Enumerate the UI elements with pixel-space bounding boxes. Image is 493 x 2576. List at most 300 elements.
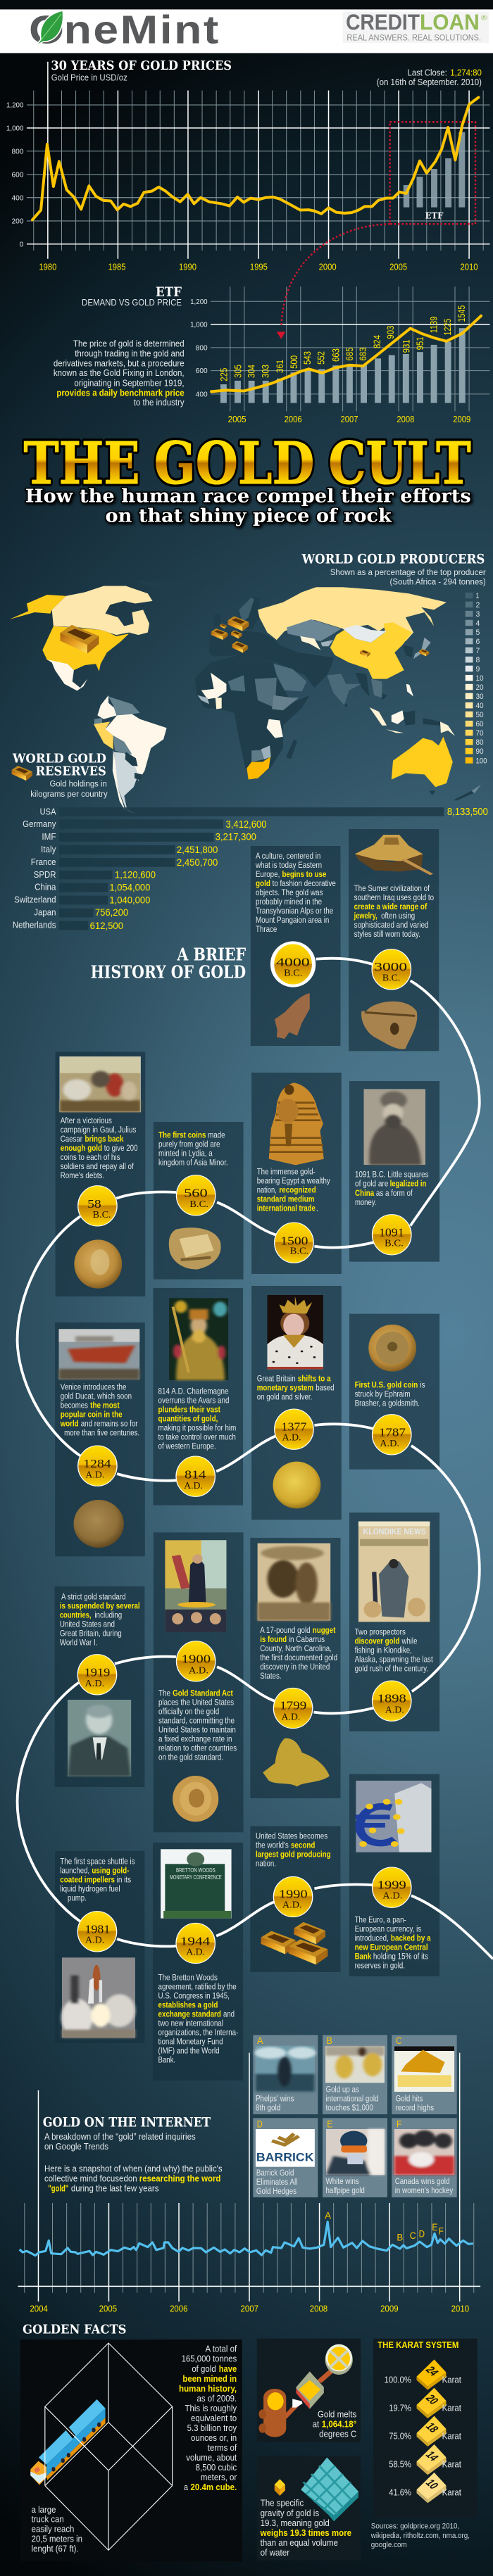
panel: 4000 B.C.: what is today Eastern [255, 861, 322, 870]
chart: ETF demand vs gold price: 1225 [443, 319, 453, 335]
panel: 1799 A.D.: County, North Carolina, [260, 1644, 332, 1653]
reserves bar: Germany: Germany [23, 819, 56, 830]
medallion: 58 B.C.: B.C. [93, 1208, 111, 1220]
subtitle [25, 486, 471, 526]
heading: gold on the internet: on Google Trends [44, 2142, 108, 2152]
chart: ETF demand vs gold price: 2007 [340, 414, 358, 424]
panel: 1898 A.D.: discover gold [355, 1637, 399, 1646]
medallion: 1900 A.D.: A.D. [189, 1665, 208, 1676]
medallion: 1919 A.D. [77, 1655, 117, 1695]
panel: 1500 B.C.: standard medium [257, 1195, 314, 1204]
medallion: 4000 B.C.: 4000 [276, 956, 310, 969]
panel: 1787 A.D.: is [420, 1381, 425, 1390]
panel: 1898 A.D.: gold rush of the century. [355, 1665, 428, 1674]
medallion: 1500 B.C.: 1500 [280, 1235, 308, 1248]
panel: 1898 A.D.: Two prospectors [355, 1628, 406, 1637]
panel: 1900 A.D.: The [158, 1688, 170, 1698]
panel: 4000 B.C.: Thrace [256, 925, 277, 934]
panel: 58 B.C.: to give 200 [104, 1144, 138, 1153]
panel: 1944 A.D.: U.S. Congress in 1945, [158, 1991, 230, 2001]
heading: golden facts: GOLDEN FACTS [23, 2323, 126, 2337]
panel: 4000 B.C.: Transylvanian Alps or the [256, 907, 333, 916]
panel: 1981 A.D.: The first space shuttle is [60, 1857, 135, 1867]
panel: 1999 A.D.: European currency, is [355, 1924, 421, 1934]
text: truck length: truck can [32, 2515, 64, 2525]
panel: 1900 A.D.: on the gold standard. [158, 1753, 223, 1762]
karat row: 18 [389, 2416, 462, 2446]
text: truck length: lenght (67 ft). [32, 2544, 79, 2554]
panel: 560 B.C.: made [208, 1131, 225, 1140]
panel: 1944 A.D.: (IMF) and the World [158, 2046, 220, 2056]
image: gold bars [261, 1922, 327, 1964]
panel: specific gravity: The specific [261, 2499, 304, 2508]
chart: ETF demand vs gold price [190, 224, 490, 424]
panel: specific gravity: than an equal volume [261, 2538, 338, 2548]
line chart: 30 years of gold prices: 1,200 [6, 101, 23, 109]
text: total gold mined: volume, about [186, 2453, 237, 2463]
reserves bars: remaining countries: Netherlands [13, 921, 56, 930]
medallion: 1900 A.D.: 1900 [182, 1653, 211, 1666]
text: snapshot of gold searches: collective mind focusedon [44, 2173, 137, 2184]
panel: 1500 B.C.: The immense gold- [257, 1167, 316, 1177]
map legend: 2 [475, 600, 480, 610]
panel: 58 B.C. [56, 1052, 145, 1296]
reserves bars: remaining countries: 612,500 [90, 920, 123, 931]
panel: 1919 A.D.: United States and [60, 1620, 115, 1629]
chart: ETF demand vs gold price: 903 [385, 326, 396, 339]
text: total gold mined: 165,000 tonnes [182, 2354, 237, 2364]
medallion: 1500 B.C. [275, 1223, 313, 1263]
panel: 3000 B.C.: jewelry, [354, 911, 377, 921]
reserves bars: remaining countries: SPDR [34, 870, 56, 880]
panel: 1919 A.D.: including [94, 1610, 122, 1620]
panel: 1500 B.C.: international trade [257, 1204, 316, 1213]
chart year labels [30, 2304, 469, 2314]
news tile C: gold record highs [392, 2035, 457, 2114]
text: truck length: easily reach [32, 2525, 74, 2534]
reserves bars: remaining countries: Switzerland [14, 895, 56, 905]
news tile F: Canada hockey: F [397, 2119, 401, 2130]
medallion: 1500 B.C.: B.C. [290, 1245, 308, 1256]
panel: 3000 B.C. [349, 829, 439, 1051]
line chart: 30 years of gold prices: 600 [12, 171, 23, 179]
line chart: 30 years of gold prices: 0 [20, 241, 23, 248]
karat row: 20: Karat [442, 2403, 462, 2413]
medallion: 1091 B.C.: 1091 [379, 1226, 404, 1239]
medallion: 1981 A.D. [77, 1912, 117, 1952]
panel: 58 B.C.: Caesar [61, 1135, 82, 1144]
panel: 1898 A.D.: while [401, 1637, 417, 1646]
map legend: 4 [475, 619, 480, 628]
map legend: 60 [475, 719, 484, 728]
chart year labels: 2010 [451, 2304, 469, 2314]
karat row: 10: Karat [442, 2487, 462, 2498]
text: total gold mined: have [219, 2364, 237, 2374]
panel: 814 A.D.: making it possible for him [158, 1423, 236, 1433]
panel: 1981 A.D.: coated impellers [60, 1875, 115, 1885]
panel: 1799 A.D. [250, 1538, 340, 1798]
panel: 4000 B.C.: A culture, centered in [256, 852, 320, 861]
karat row: 24: 24 [423, 2364, 442, 2378]
medallion: 1944 A.D.: 1944 [180, 1935, 210, 1948]
icon: truck [30, 2399, 106, 2485]
image: English gold coin [273, 1462, 320, 1508]
CreditLoan logo: CREDIT [346, 10, 420, 34]
text: total gold mined: meters, or [201, 2473, 237, 2482]
medallion: 1990 A.D.: A.D. [282, 1899, 302, 1910]
news tile A: Phelps: A [257, 2035, 263, 2046]
image: Venice painting [58, 1329, 139, 1379]
panel: 1981 A.D.: liquid hydrogen fuel [60, 1884, 120, 1894]
panel: 1990 A.D.: United States becomes [256, 1831, 327, 1841]
medallion: 1990 A.D. [273, 1876, 313, 1917]
chart: ETF demand vs gold price: 824 [373, 335, 382, 348]
karat row: 18: Karat [442, 2431, 462, 2442]
panel: 4000 B.C.: objects. The gold was [256, 888, 323, 897]
image: gold nugget [263, 1738, 330, 1786]
medallion: 814 A.D.: 814 [185, 1468, 206, 1482]
image: pharaoh mask [269, 1082, 324, 1165]
panel: 58 B.C.: After a victorious [61, 1116, 112, 1125]
icon: foundry [258, 2344, 353, 2437]
panel: 560 B.C.: kingdom of Asia Minor. [158, 1158, 228, 1168]
panel: 1990 A.D.: second [291, 1841, 315, 1850]
medallion: 560 B.C.: B.C. [189, 1198, 208, 1209]
reserves bars: remaining countries: IMF [42, 832, 56, 842]
line chart: Google Trends gold searches: E [432, 2221, 437, 2233]
text: gold fixing explanation: originating in September 1919, [74, 377, 185, 388]
medallion: 560 B.C.: 560 [184, 1187, 208, 1200]
medallion: 1981 A.D.: 1981 [85, 1923, 110, 1936]
heading: ETF demand vs gold price: DEMAND VS GOLD PRICE [82, 297, 182, 308]
line chart: Google Trends gold searches [18, 2053, 480, 2302]
panel: 1799 A.D.: A 17-pound gold [260, 1626, 311, 1635]
medallion: 1799 A.D.: 1799 [280, 1699, 306, 1712]
text: total gold mined: terms of [208, 2443, 237, 2453]
panel: 1900 A.D.: Gold Standard Act [173, 1688, 233, 1698]
line chart: 30 years of gold prices: 2005 [389, 261, 407, 272]
panel: 58 B.C.: enough gold [61, 1144, 102, 1153]
panel: 1284 A.D.: popular coin in the [61, 1410, 123, 1420]
panel: 1919 A.D.: A strict gold standard [61, 1592, 126, 1602]
panel: 1944 A.D.: agreement, ratified by the [158, 1982, 237, 1992]
map legend [466, 591, 487, 765]
karat row: 10: 41.6% [389, 2487, 411, 2498]
panel: 1284 A.D.: gold Ducat, which soon [61, 1391, 132, 1401]
news tile B: gold touches $1,000: international gold [326, 2095, 379, 2104]
heading: world gold reserves [12, 751, 108, 798]
panel: 1500 B.C.: bearing Egypt a wealthy [257, 1176, 330, 1186]
image: Bretton Woods sign: BRETTON WOODS [176, 1867, 216, 1874]
panel: 1799 A.D.: is found [260, 1635, 287, 1644]
panel: 1898 A.D. [349, 1513, 439, 1731]
medallion: 1284 A.D. [78, 1446, 117, 1486]
karat row: 14: Karat [442, 2459, 462, 2470]
reserves bars: remaining countries: 3,217,300 [216, 831, 256, 842]
subtitle: on that shiny piece of rock [106, 505, 392, 526]
image: arrowhead [275, 993, 310, 1039]
gold bar markers [60, 616, 429, 657]
karat row: 24: 100.0% [385, 2375, 411, 2385]
panel: 1284 A.D.: the most [90, 1401, 120, 1410]
panel: 4000 B.C.: Mount Pangaion area in [256, 916, 329, 925]
title: The Gold Cult [23, 429, 471, 498]
news tile C: gold record highs: C [396, 2035, 402, 2046]
medallion: 3000 B.C.: B.C. [382, 972, 400, 983]
text: total gold mined: as of 2009. [196, 2394, 237, 2404]
chart: ETF demand vs gold price: 931 [401, 339, 411, 353]
panel: 1981 A.D.: launched, [60, 1866, 89, 1876]
medallion: 1284 A.D.: A.D. [85, 1469, 104, 1480]
panel: 1799 A.D.: nugget [313, 1626, 336, 1635]
panel: 1377 A.D.: monetary system [257, 1383, 313, 1393]
reserves bars: remaining countries: China [35, 883, 56, 892]
icon: gold cube vs water blocks [275, 2458, 358, 2521]
panel: 58 B.C.: Rome's debts. [61, 1171, 104, 1180]
panel: gold melts [257, 2339, 361, 2442]
panel: 3000 B.C.: styles still worn today. [354, 930, 420, 939]
panel: 1091 B.C.: legalized in [390, 1180, 426, 1189]
panel: 1944 A.D.: organizations, the Interna- [158, 2028, 239, 2038]
panel: 1999 A.D.: The Euro, a pan- [355, 1915, 406, 1925]
panel: the karat system [373, 2339, 478, 2518]
medallion: 1787 A.D.: 1787 [379, 1426, 406, 1439]
text: total gold mined: been mined in [182, 2374, 237, 2384]
text: total gold mined: 20.4m cube. [191, 2482, 237, 2492]
medallion: 1377 A.D. [275, 1409, 313, 1449]
header band [0, 0, 493, 53]
panel: 1944 A.D.: tional Monetary Fund [158, 2037, 223, 2047]
panel: 1900 A.D.: standard, committing the [158, 1716, 235, 1726]
heading: 30 years of gold prices: 30 YEARS OF GOLD PRICES [51, 59, 232, 73]
map legend: 1 [475, 591, 480, 600]
medallion: 1919 A.D.: A.D. [85, 1677, 104, 1688]
map legend: 6 [475, 637, 480, 646]
panel: 1944 A.D. [153, 1843, 243, 2081]
text: gold fixing explanation: The price of gold is determined [73, 338, 185, 348]
medallion: 1799 A.D. [273, 1688, 313, 1729]
title: The Gold Cult: THE [23, 429, 140, 498]
news tile E: White halfpipe: E [327, 2119, 332, 2130]
OneMint logo: O [29, 7, 64, 51]
chart: ETF demand vs gold price: 683 [358, 347, 368, 360]
image: space shuttle launch [61, 1957, 135, 2038]
chart: ETF demand vs gold price: 225 [219, 368, 229, 381]
text: truck length [32, 2505, 82, 2554]
medallion: 1919 A.D.: 1919 [85, 1666, 110, 1679]
line chart: 30 years of gold prices: 1995 [250, 261, 268, 272]
medallion: 58 B.C. [78, 1186, 117, 1226]
line chart: Google Trends gold searches: C [410, 2230, 416, 2241]
news tile F: Canada hockey: in women's hockey [395, 2186, 454, 2195]
panel: 4000 B.C.: gold [256, 879, 270, 888]
text: snapshot of gold searches: during the last few years [71, 2183, 159, 2194]
CreditLoan logo [343, 10, 489, 43]
map legend: 7 [475, 646, 480, 655]
medallion: 1787 A.D.: A.D. [380, 1437, 399, 1448]
heading: a brief history of gold [91, 944, 246, 982]
reserves bar: USA [40, 807, 488, 818]
text: total gold mined: 8,500 cubic [196, 2463, 237, 2473]
CreditLoan logo: ® [481, 14, 487, 22]
panel: 1091 B.C.: of gold are [355, 1180, 388, 1189]
medallion: 1944 A.D.: A.D. [186, 1946, 205, 1957]
karat row: 18: 18 [423, 2421, 442, 2435]
text: total gold mined: 5.3 billion troy [187, 2423, 237, 2433]
panel: 1944 A.D.: two new international [158, 2019, 223, 2028]
heading: a brief history of gold: HISTORY OF GOLD [91, 961, 246, 982]
panel: 1799 A.D.: in Cabarrus [289, 1635, 325, 1644]
text: gold fixing explanation: to the industry [134, 397, 185, 408]
map legend: 90 [475, 747, 484, 756]
image: King Richard II portrait [267, 1295, 323, 1369]
panel: 4000 B.C. [251, 846, 340, 1046]
heading: world gold reserves: kilograms per country [30, 789, 108, 798]
panel: 58 B.C.: coins to each of his [61, 1153, 120, 1162]
panel: 1944 A.D.: establishes a gold [158, 2000, 218, 2010]
panel: 1284 A.D.: becomes [61, 1401, 88, 1410]
medallion: 58 B.C.: 58 [87, 1198, 101, 1211]
news tile D: Barrick: BARRICK [256, 2151, 314, 2164]
news tile B: gold touches $1,000 [323, 2035, 387, 2114]
text: gold fixing explanation: provides a daily benchmark price [56, 387, 185, 398]
chart: ETF demand vs gold price: 305 [233, 365, 244, 378]
line chart: 30 years of gold prices [6, 62, 490, 272]
panel: 1898 A.D.: fishing in Klondike, [355, 1646, 412, 1655]
panel: 560 B.C.: The first coins [158, 1131, 206, 1140]
panel: 1919 A.D.: Great Britain, during [60, 1629, 122, 1639]
panel: 1919 A.D.: World War I. [60, 1638, 97, 1648]
heading: gold on the internet [43, 2115, 211, 2152]
line chart: 30 years of gold prices: 2000 [319, 261, 337, 272]
panel: 1799 A.D.: States. [260, 1672, 282, 1681]
line chart: 30 years of gold prices: 1980 [39, 261, 57, 272]
panel: 814 A.D.: plunders their vast [158, 1405, 220, 1415]
panel: 1900 A.D.: a fixed exchange rate in [158, 1734, 232, 1744]
image: ziggurat [355, 835, 433, 875]
chart: ETF demand vs gold price: 1545 [456, 305, 467, 322]
panel: 1981 A.D. [55, 1851, 144, 2043]
chart: ETF demand vs gold price: 1139 [429, 317, 439, 333]
panel: truck and gold cube [20, 2340, 242, 2561]
chart: ETF demand vs gold price: 2009 [453, 414, 471, 424]
text: gold fixing explanation: through trading in the gold and [75, 348, 185, 358]
panel: 1799 A.D.: discovery in the United [260, 1662, 330, 1672]
panel: 1981 A.D.: pump. [68, 1893, 87, 1903]
panel: 3000 B.C.: often using [381, 911, 415, 921]
medallion: 3000 B.C.: 3000 [374, 961, 407, 973]
title: The Gold Cult: GOLD [154, 429, 314, 498]
line chart: Google Trends gold searches: A [325, 2210, 331, 2221]
image: Bretton Woods sign: MONETARY CONFERENCE [170, 1874, 222, 1881]
news tile A: Phelps: 8th gold [256, 2104, 280, 2113]
world map [9, 580, 481, 814]
news tile F: Canada hockey: Canada wins gold [395, 2177, 449, 2186]
panel: 58 B.C.: soldiers and repay all of [61, 1162, 134, 1171]
panel: 1919 A.D. [55, 1586, 144, 1787]
medallion: 1999 A.D. [373, 1867, 411, 1907]
ETF bars inset [404, 132, 465, 208]
reserves bar: Germany [23, 819, 267, 831]
panel: 1999 A.D.: introduced, [355, 1933, 389, 1943]
line chart: Google Trends gold searches: F [439, 2225, 444, 2237]
news tile D: Barrick [253, 2118, 318, 2197]
map legend: 70 [475, 728, 484, 738]
panel: 1091 B.C.: as a form of [376, 1189, 413, 1198]
line chart: 30 years of gold prices: 200 [12, 217, 23, 225]
news tile D: Barrick: D [257, 2119, 263, 2130]
panel: 1999 A.D.: holding 15% of its [373, 1952, 428, 1962]
karat row: 14: 14 [423, 2449, 442, 2463]
karat row: 10: 10 [423, 2477, 442, 2491]
line chart: 30 years of gold prices: 800 [12, 148, 23, 156]
panel: 4000 B.C.: probably mined in the [256, 897, 322, 907]
image: Sumerian helmet [361, 1002, 417, 1049]
map legend: 30 [475, 692, 484, 701]
text: total gold mined: A total of [206, 2344, 237, 2354]
panel: gold melts: 1,064.18° [322, 2419, 356, 2430]
title: The Gold Cult: GOLD [154, 429, 314, 498]
line chart: 30 years of gold prices: 1985 [108, 261, 126, 272]
image: Reed gold nugget engraving [258, 1543, 330, 1621]
medallion: 1898 A.D. [373, 1681, 411, 1721]
panel: 4000 B.C.: begins to use [282, 870, 326, 879]
panel: 1500 B.C. [251, 1073, 342, 1274]
reserves bar: Germany: 3,412,600 [226, 819, 267, 831]
panel: 1990 A.D. [250, 1826, 340, 1972]
heading: gold on the internet: GOLD ON THE INTERNET [43, 2115, 211, 2130]
karat row: 24 [385, 2359, 462, 2390]
chart year labels: 2008 [310, 2304, 327, 2314]
panel: 1944 A.D.: The Bretton Woods [158, 1973, 218, 1983]
panel: 1091 B.C.: 1091 B.C. Little squares [355, 1170, 428, 1180]
medallion: 1091 B.C.: B.C. [385, 1237, 404, 1249]
medallion: 1981 A.D.: A.D. [85, 1934, 104, 1945]
panel: 1999 A.D.: new European Central [355, 1943, 428, 1952]
text: gold fixing explanation: known as the Gold Fixing in London, [54, 367, 185, 378]
panel: 1900 A.D.: relation to other countries [158, 1743, 237, 1753]
panel: 1284 A.D.: Venice introduces the [61, 1382, 127, 1392]
subtitle: on that shiny piece of rock [106, 505, 392, 526]
news tile E: White halfpipe: White wins [326, 2177, 359, 2186]
heading: world gold reserves: WORLD GOLD [12, 751, 106, 766]
title: The Gold Cult: THE [23, 429, 140, 498]
chart: ETF demand vs gold price: 2006 [285, 414, 302, 424]
panel: 1377 A.D.: shifts to a [298, 1374, 331, 1384]
chart year labels: 2004 [30, 2304, 48, 2314]
panel: 1377 A.D.: on gold and silver. [257, 1392, 312, 1402]
panel: specific gravity: of water [261, 2548, 289, 2558]
map legend: 50 [475, 710, 484, 719]
medallion: 1284 A.D.: 1284 [83, 1458, 111, 1470]
chart: ETF demand vs gold price: 543 [302, 351, 313, 365]
map legend: 100 [475, 757, 487, 765]
reserves bars: remaining countries: 1,040,000 [109, 895, 150, 906]
panel: 3000 B.C.: southern Iraq uses gold to [354, 893, 434, 902]
reserves bars: remaining countries [13, 831, 256, 931]
text: total gold mined: human history, [179, 2384, 237, 2394]
heading: ETF demand vs gold price: ETF [156, 284, 182, 300]
map legend: 40 [475, 701, 484, 710]
panel: 1787 A.D. [349, 1314, 439, 1470]
panel: 1799 A.D.: the first documented gold [260, 1653, 337, 1662]
image: Prosperity poster [165, 1540, 226, 1632]
chart year labels: 2005 [99, 2304, 117, 2314]
panel: 814 A.D.: to take control over much [158, 1432, 236, 1442]
panel: 814 A.D.: overruns the Avars and [158, 1396, 229, 1406]
medallion: 4000 B.C. [273, 942, 314, 986]
panel: 3000 B.C.: create a wide range of [354, 902, 427, 911]
